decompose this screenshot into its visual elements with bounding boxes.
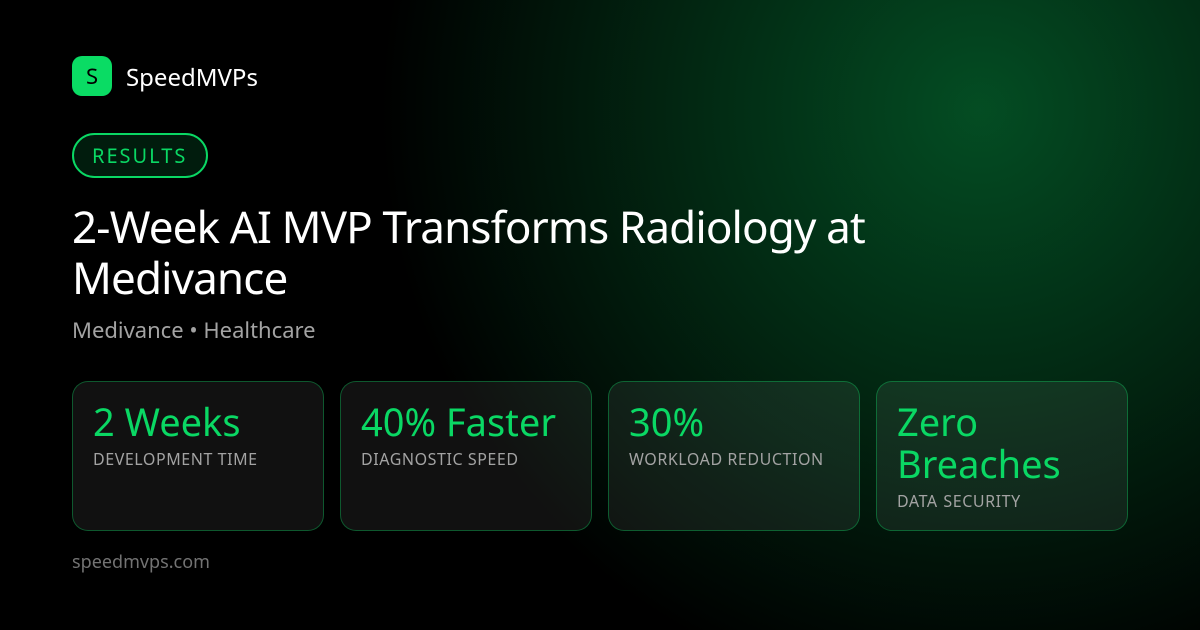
logo icon	[72, 56, 112, 96]
results badge	[72, 133, 208, 178]
stat card: diagnostic speed: DIAGNOSTIC SPEED	[361, 448, 519, 470]
website footer: speedmvps.com	[72, 550, 210, 574]
logo icon: S	[86, 61, 98, 91]
stat card: diagnostic speed: 40% Faster	[361, 396, 556, 448]
stat card: workload reduction: WORKLOAD REDUCTION	[629, 448, 824, 470]
stat card: development time: DEVELOPMENT TIME	[93, 448, 258, 470]
subtitle: Medivance • Healthcare	[72, 315, 316, 345]
stat card: workload reduction	[608, 381, 860, 531]
stat card: workload reduction: 30%	[629, 396, 704, 448]
stat card: data security: DATA SECURITY	[897, 490, 1021, 512]
brand name: SpeedMVPs	[126, 61, 258, 94]
stat card: data security	[876, 381, 1128, 531]
title: 2-Week AI MVP Transforms Radiology at Medivance	[72, 196, 865, 307]
stat card: development time: 2 Weeks	[93, 396, 241, 448]
stat card: diagnostic speed	[340, 381, 592, 531]
stat card: data security: Zero Breaches	[897, 396, 1061, 490]
stat card: development time	[72, 381, 324, 531]
results badge: RESULTS	[92, 142, 187, 169]
